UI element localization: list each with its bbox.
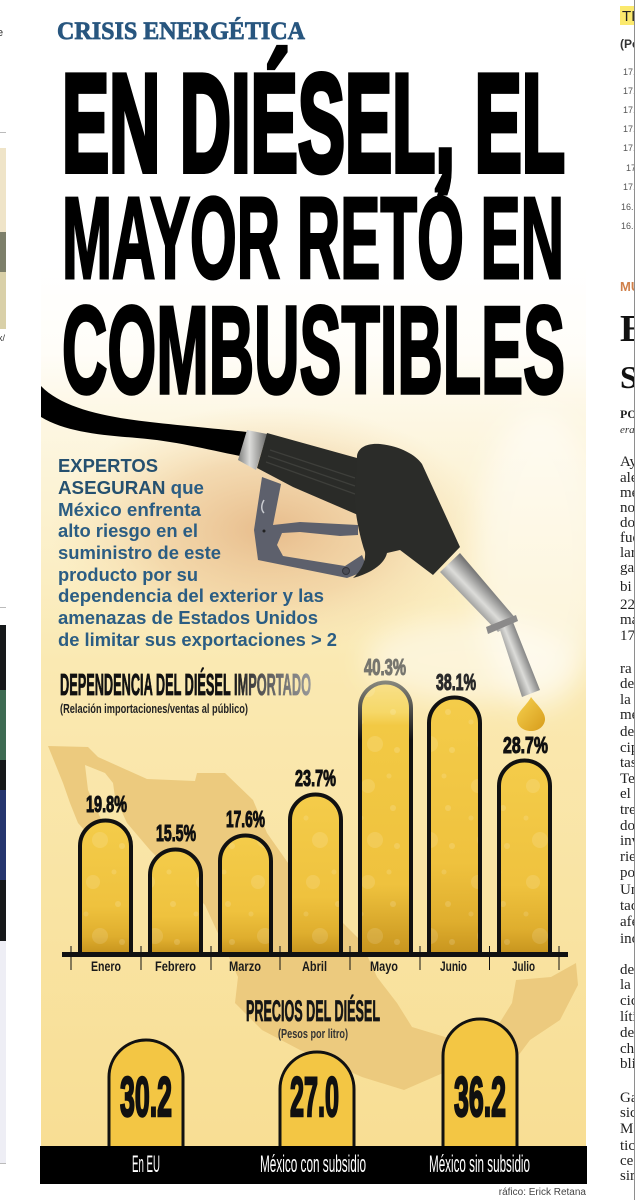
intro text: producto por su [58, 565, 198, 585]
footer band with labels [40, 1146, 587, 1184]
right page column: ra [620, 661, 632, 677]
month labels: Marzo [229, 958, 261, 974]
bar: abril: 23.7% [295, 765, 336, 791]
right page column: tic [620, 1138, 635, 1154]
month labels: Enero [91, 958, 121, 974]
price: sin subsidio: 36.2 [454, 1065, 506, 1128]
intro text: suministro de este [58, 543, 221, 563]
intro text: México enfrenta [58, 500, 202, 520]
month labels: Julio [512, 958, 535, 974]
credit: ráfico: Erick Retana [499, 1187, 586, 1198]
price bars [109, 1019, 517, 1146]
kicker: crisis energetica: CRISIS ENERGÉTICA [57, 17, 305, 45]
bar: febrero: 15.5% [156, 820, 196, 846]
right page column: ce [620, 1153, 634, 1169]
bar: enero [80, 791, 131, 952]
bar: julio [499, 732, 550, 952]
month labels: Mayo [370, 958, 398, 974]
price: sin subsidio [443, 1019, 517, 1146]
panel: cream background [41, 357, 586, 1146]
right page column: ga [620, 560, 634, 576]
month labels: Junio [440, 958, 467, 974]
trigger guard [254, 477, 368, 578]
nozzle body [353, 444, 460, 578]
bar: junio: 38.1% [436, 669, 476, 695]
right page column: sir [620, 1168, 635, 1184]
right page column [620, 6, 635, 1184]
right page column: ch [620, 1041, 635, 1057]
price: con subsidio: 27.0 [290, 1065, 339, 1128]
bar: marzo: 17.6% [226, 806, 265, 832]
right page column: la [620, 692, 631, 708]
right page column: do [620, 818, 635, 834]
right page column: de [620, 1025, 634, 1041]
right page column: do [620, 515, 635, 531]
price: con subsidio [280, 1052, 354, 1146]
intro text: alto riesgo en el [58, 521, 198, 541]
right page column: de [620, 724, 634, 740]
heading: precios [246, 994, 380, 1041]
intro text: amenazas de Estados Unidos [58, 608, 318, 628]
footer band with labels: En EU [132, 1151, 160, 1178]
bar: enero: 19.8% [86, 791, 127, 817]
right page column: TI [622, 8, 635, 25]
right page column: el [620, 786, 631, 802]
bar: julio: 28.7% [503, 732, 548, 758]
subheading: precios: (Pesos por litro) [278, 1026, 348, 1041]
month labels: Abril [302, 958, 327, 974]
icon: fuel nozzle [238, 430, 540, 697]
right page column: la [620, 977, 631, 993]
icon: fuel drop [517, 697, 545, 731]
icon: fuel hose [41, 386, 247, 456]
map of Mexico [48, 746, 578, 1090]
bar: marzo [220, 806, 271, 952]
bar: abril [290, 765, 341, 952]
bar: mayo: 40.3% [364, 654, 406, 680]
bar: junio [429, 669, 480, 952]
intro text: de limitar sus exportaciones > 2 [58, 630, 337, 650]
footer band with labels: México sin subsidio [429, 1151, 530, 1178]
right page column: era [620, 424, 635, 436]
intro text: EXPERTOS [58, 456, 158, 476]
intro text: ASEGURAN que [58, 478, 204, 498]
text: PRECIOS DEL DIÉSEL [246, 994, 380, 1028]
right page column: po [620, 865, 635, 881]
grip [257, 433, 358, 515]
month labels: Febrero [155, 958, 196, 974]
right page column: no [620, 500, 635, 516]
month labels [91, 958, 535, 974]
bar: mayo [360, 654, 411, 952]
bar chart: dependencia mensual [62, 654, 568, 974]
subheading: dependencia: (Relación importaciones/ventas al público) [60, 701, 248, 716]
intro text [58, 456, 337, 650]
bar: febrero [150, 820, 201, 952]
right page column: 22 [620, 597, 635, 613]
right page column: bi [620, 579, 632, 595]
nozzle spout [440, 553, 540, 697]
chart axis [62, 946, 568, 970]
title [62, 46, 565, 420]
footer band with labels: México con subsidio [260, 1151, 366, 1178]
collar [238, 430, 267, 470]
heading: dependencia [60, 667, 311, 716]
right page column: de [620, 962, 634, 978]
intro text: dependencia del exterior y las [58, 586, 324, 606]
left page sliver [0, 27, 6, 1164]
price: en EU: 30.2 [120, 1065, 172, 1128]
price: en EU [109, 1040, 183, 1146]
right page column: de [620, 676, 634, 692]
right page column: Te [620, 771, 635, 787]
